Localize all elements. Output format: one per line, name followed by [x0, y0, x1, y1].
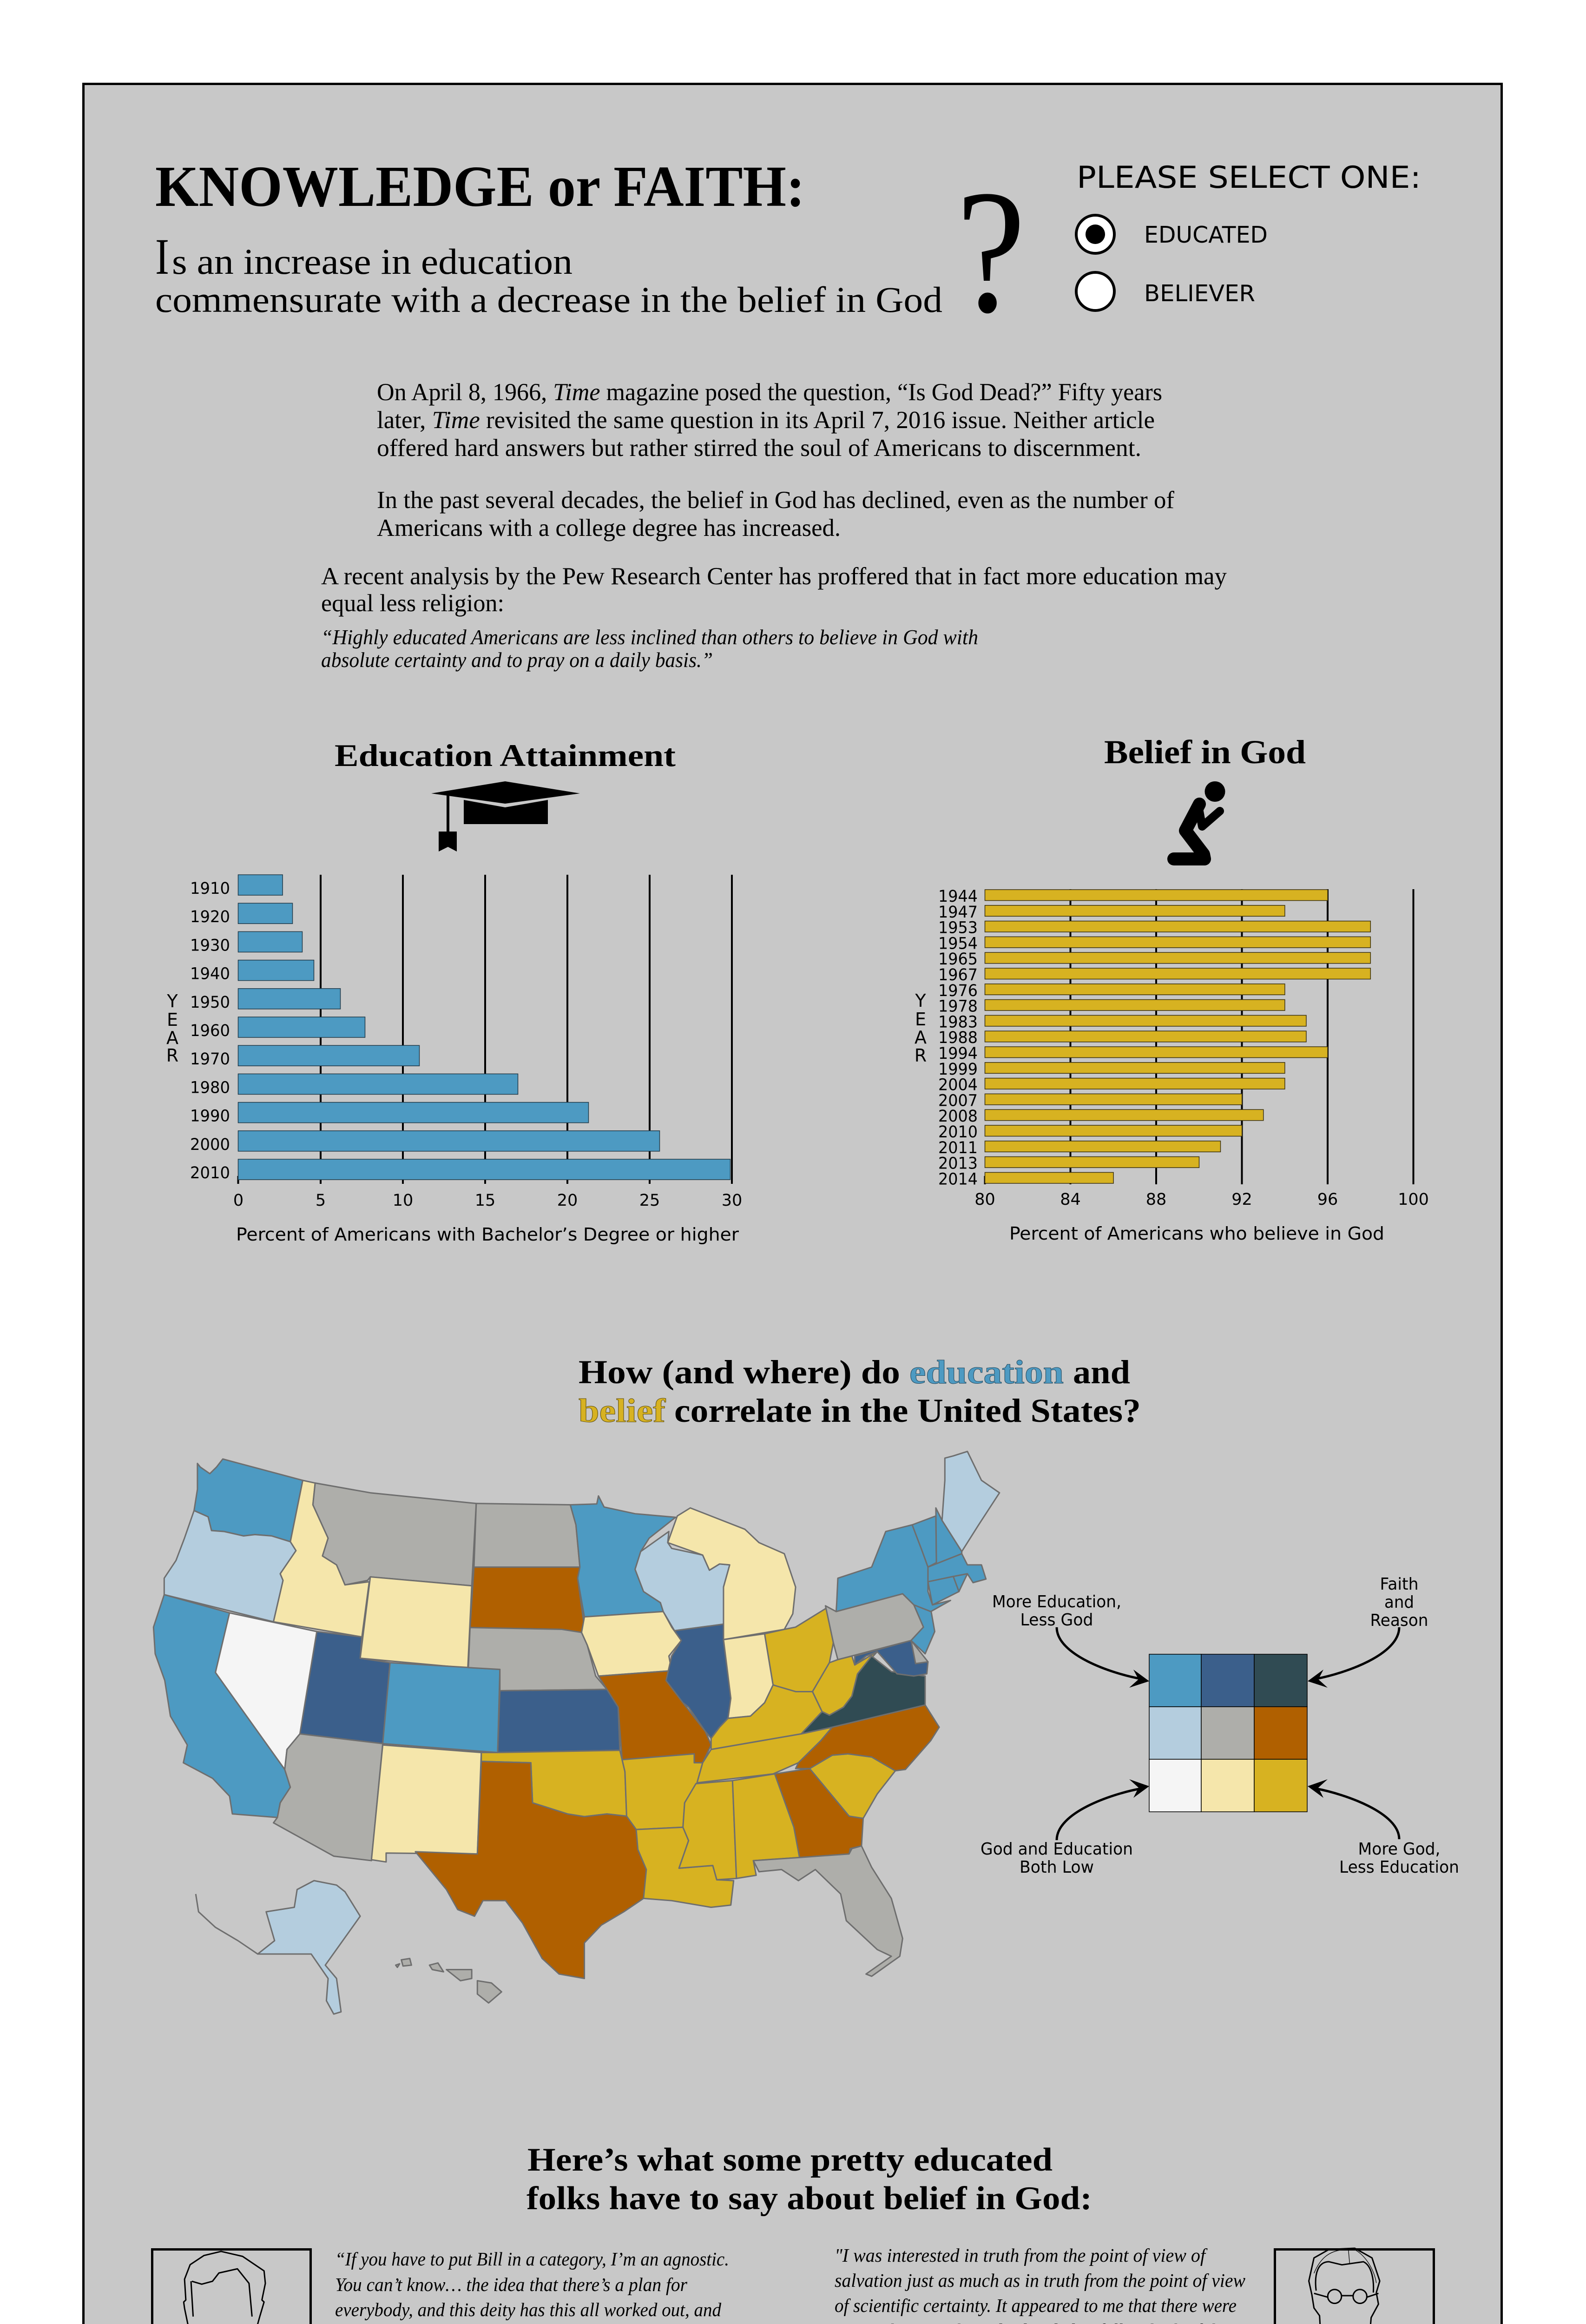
x axis ticks: 25 — [639, 1191, 660, 1210]
axis title: year: Y — [915, 990, 926, 1011]
state: Vermont — [912, 1516, 936, 1567]
state: Kentucky — [711, 1685, 822, 1750]
quote: Bill Nye: everybody, and this deity has this all worked out, and — [335, 2299, 721, 2320]
label: faith and reason: and — [1384, 1593, 1414, 1612]
arrow: top right — [1308, 1627, 1399, 1688]
radio: educated selected — [1076, 215, 1114, 253]
map legend — [981, 1575, 1459, 1877]
state: New York — [836, 1525, 950, 1611]
portrait: Bill Nye — [151, 2250, 310, 2324]
label: faith and reason — [1370, 1575, 1428, 1630]
state: Missouri — [599, 1670, 711, 1763]
map heading: correlate in the United States? — [674, 1392, 1141, 1429]
quote: Georges Lemaitre: "I was interested in truth from the point of view of — [835, 2245, 1208, 2266]
state: Massachusetts — [928, 1554, 986, 1583]
quote: Georges Lemaitre — [835, 2245, 1254, 2324]
x axis title: Percent of Americans who believe in God — [1009, 1223, 1384, 1244]
x axis ticks: 20 — [557, 1191, 578, 1210]
x axis ticks: 0 — [233, 1191, 243, 1210]
state: Oklahoma — [481, 1750, 626, 1816]
state: Mississippi — [679, 1781, 737, 1880]
x axis title: Percent of Americans with Bachelor’s Degree or higher — [236, 1224, 739, 1245]
state: Minnesota — [570, 1496, 676, 1617]
state: Colorado — [383, 1663, 500, 1753]
state: Idaho — [273, 1480, 369, 1637]
intro text: later, Time revisited the same question in its April 7, 2016 issue. Neither article — [377, 407, 1155, 434]
intro text — [321, 379, 1227, 672]
state: Connecticut — [928, 1577, 959, 1605]
quote: Bill Nye — [335, 2248, 729, 2324]
state: Nebraska — [468, 1628, 607, 1691]
label: more education less god: Less God — [1020, 1611, 1093, 1630]
year labels: 2011 — [938, 1139, 978, 1157]
year labels: 1976 — [938, 982, 978, 1000]
axis title: year — [166, 991, 178, 1066]
year labels: 1960 — [190, 1022, 230, 1040]
axis title: year: E — [915, 1009, 926, 1030]
state: Alaska — [196, 1881, 360, 2014]
state: Iowa — [581, 1611, 681, 1676]
state: Virginia — [801, 1656, 925, 1734]
year labels: 1980 — [190, 1078, 230, 1097]
chart heading: Belief in God — [1104, 733, 1306, 771]
year labels: 1994 — [938, 1044, 978, 1063]
bars: bachelor's degree share — [238, 875, 730, 1180]
state: South Dakota — [470, 1567, 585, 1632]
x axis ticks: 100 — [1398, 1190, 1429, 1209]
radio label educated: EDUCATED — [1144, 222, 1268, 248]
radio: believer — [1076, 272, 1114, 310]
axis title: year: R — [915, 1045, 927, 1066]
icon: graduation cap — [431, 781, 580, 852]
state: Arkansas — [622, 1754, 703, 1829]
bivariate colour grid — [1149, 1654, 1307, 1812]
year labels: 1954 — [938, 934, 978, 953]
label: more god less education: More God, — [1358, 1840, 1441, 1859]
year labels — [938, 887, 978, 1188]
state: Montana — [313, 1483, 476, 1586]
state: Wyoming — [360, 1577, 472, 1668]
state: Utah — [300, 1631, 390, 1743]
choropleth map of United States — [153, 1452, 1000, 2014]
year labels: 2010 — [938, 1123, 978, 1142]
axis title: year: Y — [166, 991, 178, 1011]
state: California — [153, 1595, 290, 1817]
state: Tennessee — [697, 1727, 832, 1783]
quotes heading: Here’s what some pretty educated — [527, 2142, 1053, 2178]
subtitle — [155, 228, 942, 320]
state: Delaware — [911, 1640, 928, 1664]
year labels: 1947 — [938, 903, 978, 922]
year labels: 1965 — [938, 950, 978, 969]
quote: Georges Lemaitre: salvation just as much as in truth from the point of view — [835, 2270, 1246, 2291]
label: more education less god: More Education, — [992, 1592, 1121, 1611]
state: North Dakota — [474, 1504, 580, 1567]
x axis ticks: 5 — [316, 1191, 326, 1210]
year labels: 1950 — [190, 993, 230, 1012]
year labels — [190, 879, 230, 1182]
year labels: 1988 — [938, 1029, 978, 1047]
x axis ticks — [233, 1191, 742, 1210]
subtitle: I — [155, 228, 169, 285]
year labels: 1910 — [190, 879, 230, 898]
arrow: bottom left — [1057, 1779, 1149, 1840]
axis title: year: A — [166, 1028, 178, 1048]
state: Texas — [415, 1762, 646, 1979]
state: Hawaii — [396, 1959, 501, 2003]
label: more god less education — [1339, 1840, 1459, 1877]
year labels: 1990 — [190, 1107, 230, 1126]
x axis ticks: 96 — [1317, 1190, 1338, 1209]
axis title: year: A — [915, 1027, 927, 1048]
year labels: 1983 — [938, 1013, 978, 1031]
poll heading: PLEASE SELECT ONE: — [1077, 160, 1421, 195]
year labels: 1978 — [938, 997, 978, 1016]
intro text: “Highly educated Americans are less inclined than others to believe in God with — [321, 625, 978, 649]
axis title: year: E — [167, 1010, 178, 1030]
x axis ticks: 80 — [974, 1190, 995, 1209]
map heading — [579, 1353, 1141, 1429]
year labels: 1944 — [938, 887, 978, 906]
axis title: year — [915, 990, 927, 1066]
year labels: 1970 — [190, 1050, 230, 1069]
state: Alabama — [732, 1774, 800, 1878]
state: Louisiana — [636, 1827, 734, 1908]
quote: Bill Nye: “If you have to put Bill in a category, I’m an agnostic. — [335, 2248, 729, 2270]
year labels: 1930 — [190, 936, 230, 955]
state: Kansas — [498, 1690, 620, 1753]
state: Pennsylvania — [825, 1594, 923, 1660]
intro text: absolute certainty and to pray on a daily basis.” — [321, 648, 713, 672]
year labels: 2004 — [938, 1076, 978, 1095]
intro text: Americans with a college degree has increased. — [377, 515, 841, 541]
x axis ticks: 92 — [1231, 1190, 1252, 1209]
state: Indiana — [724, 1634, 773, 1718]
x axis ticks: 84 — [1060, 1190, 1081, 1209]
select one poll — [1076, 160, 1421, 310]
panel: education attainment chart — [166, 738, 742, 1245]
map heading: belief — [579, 1392, 666, 1429]
large question mark: ? — [956, 154, 1026, 350]
label: god and education both low: God and Education — [981, 1840, 1133, 1859]
x axis ticks: 15 — [475, 1191, 495, 1210]
x axis ticks — [974, 1190, 1429, 1209]
intro text: offered hard answers but rather stirred the soul of Americans to discernment. — [377, 435, 1141, 462]
state: Georgia — [775, 1769, 863, 1857]
year labels: 1999 — [938, 1060, 978, 1079]
arrow: top left — [1057, 1627, 1149, 1688]
label: more education less god — [992, 1592, 1121, 1630]
label: faith and reason: Faith — [1380, 1575, 1418, 1594]
state: West Virginia — [812, 1651, 877, 1715]
state: South Carolina — [809, 1754, 895, 1818]
state: Ohio — [764, 1608, 833, 1691]
subtitle: commensurate with a decrease in the belief in God — [155, 279, 942, 320]
radio label believer: BELIEVER — [1144, 280, 1255, 307]
chart heading: Education Attainment — [335, 738, 676, 773]
intro text: A recent analysis by the Pew Research Center has proffered that in fact more education may — [321, 563, 1227, 590]
year labels: 2007 — [938, 1091, 978, 1110]
year labels: 1920 — [190, 908, 230, 926]
quote: Bill Nye: You can’t know… the idea that there’s a plan for — [335, 2274, 688, 2295]
arrow: bottom right — [1308, 1779, 1399, 1839]
intro text: equal less religion: — [321, 590, 504, 617]
label: more god less education: Less Education — [1339, 1858, 1459, 1877]
label: god and education both low — [981, 1840, 1133, 1877]
map heading: How (and where) do — [579, 1353, 900, 1391]
intro text: In the past several decades, the belief in God has declined, even as the number of — [377, 487, 1174, 514]
state: Maine — [942, 1452, 1000, 1552]
year labels: 2013 — [938, 1155, 978, 1173]
year labels: 1953 — [938, 919, 978, 938]
state: Wisconsin — [635, 1532, 730, 1631]
state: Washington — [194, 1459, 303, 1542]
year labels: 2000 — [190, 1136, 230, 1154]
map heading: and — [1073, 1353, 1130, 1391]
x axis ticks: 10 — [393, 1191, 413, 1210]
label: god and education both low: Both Low — [1020, 1858, 1094, 1877]
grid lines — [238, 875, 732, 1184]
state: Maryland — [855, 1640, 928, 1676]
quote: Georges Lemaitre: of scientific certainty. It appeared to me that there were — [835, 2295, 1237, 2316]
year labels: 1940 — [190, 965, 230, 984]
bars: belief in god share — [985, 890, 1370, 1183]
state: New Mexico — [371, 1745, 481, 1862]
state: Oregon — [164, 1511, 296, 1622]
quotes heading: folks have to say about belief in God: — [526, 2180, 1092, 2217]
x axis ticks: 88 — [1146, 1190, 1166, 1209]
state: North Carolina — [796, 1705, 939, 1771]
portrait: Georges Lemaitre — [1275, 2248, 1434, 2324]
map heading: education — [909, 1353, 1064, 1391]
year labels: 2008 — [938, 1107, 978, 1126]
state: Nevada — [216, 1613, 317, 1769]
state: Arizona — [273, 1734, 383, 1861]
subtitle: s an increase in education — [172, 241, 573, 282]
year labels: 2014 — [938, 1170, 978, 1188]
state: Michigan — [668, 1508, 796, 1639]
state: Rhode Island — [953, 1574, 967, 1591]
state: New Hampshire — [928, 1508, 962, 1567]
x axis ticks: 30 — [722, 1191, 742, 1210]
quotes heading — [526, 2142, 1092, 2217]
intro text: On April 8, 1966, Time magazine posed the question, “Is God Dead?” Fifty years — [377, 379, 1162, 406]
title: KNOWLEDGE or FAITH: — [155, 155, 805, 219]
state: Illinois — [666, 1624, 731, 1738]
panel: belief in god chart — [915, 733, 1429, 1244]
year labels: 2010 — [190, 1164, 230, 1182]
year labels: 1967 — [938, 966, 978, 984]
state: Florida — [753, 1846, 902, 1976]
grid lines — [985, 889, 1414, 1184]
label: faith and reason: Reason — [1370, 1611, 1428, 1630]
state: New Jersey — [911, 1605, 934, 1654]
icon: praying figure — [1174, 781, 1225, 859]
axis title: year: R — [166, 1045, 178, 1066]
